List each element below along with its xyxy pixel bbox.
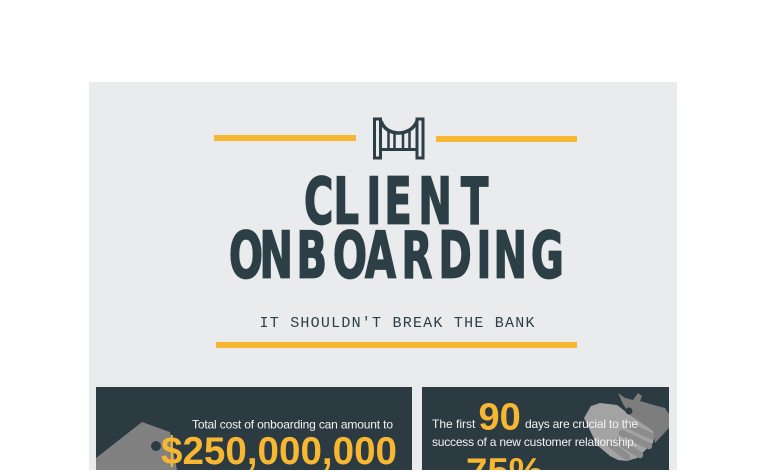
header rule: top left bbox=[214, 135, 356, 141]
icon: bridge bbox=[374, 119, 423, 158]
panel: total cost bbox=[96, 387, 412, 472]
title line: onboarding: ONBOARDING bbox=[229, 217, 564, 293]
infographic canvas bbox=[89, 82, 677, 470]
cost label: Total cost of onboarding can amount to bbox=[192, 418, 393, 432]
header rule: bottom bbox=[216, 342, 577, 348]
title bbox=[229, 163, 564, 293]
retention text: the first: The first bbox=[432, 417, 476, 431]
figure: 90: 90 bbox=[478, 396, 521, 438]
cost figure: $250,000,000 bbox=[161, 430, 397, 472]
title line: client: CLIENT bbox=[304, 163, 489, 239]
panel: page background bbox=[89, 82, 677, 470]
retention text: second line: success of a new customer relationship. bbox=[432, 435, 637, 449]
icon: price tag bbox=[96, 422, 177, 470]
panel: first 90 days bbox=[422, 387, 669, 472]
retention text: days: days are crucial to the bbox=[525, 417, 638, 431]
header rule: top right bbox=[436, 136, 577, 142]
subtitle: IT SHOULDN'T BREAK THE BANK bbox=[260, 315, 534, 332]
icon: handshake bbox=[584, 393, 669, 461]
